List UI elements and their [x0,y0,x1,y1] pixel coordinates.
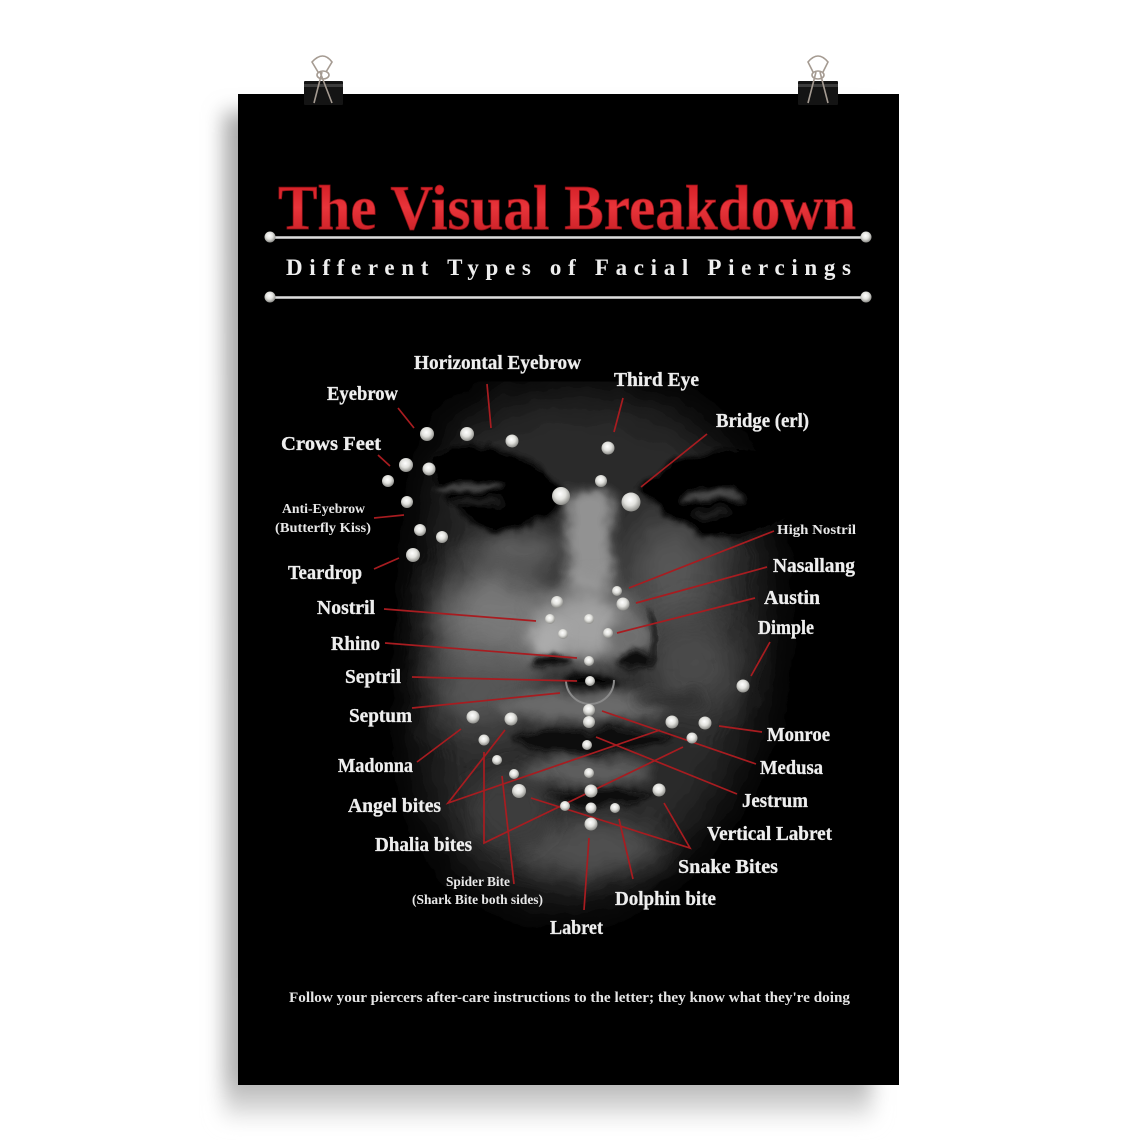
label: Nostril: Nostril [317,597,375,619]
subtitle: Different Types of Facial Piercings [286,255,851,280]
label: Bridge (erl): Bridge (erl) [716,410,809,432]
label: Dimple: Dimple [758,617,814,639]
label: Madonna: Madonna [338,755,413,777]
septum ring [566,680,614,704]
label: Third Eye: Third Eye [614,369,699,391]
label: Vertical Labret: Vertical Labret [707,823,832,845]
piercing labels [275,352,856,939]
label: Crows Feet: Crows Feet [281,433,381,455]
piercing studs [382,427,750,830]
label: Septum: Septum [349,705,412,727]
label: High Nostril: High Nostril [777,523,856,538]
nose [529,490,656,692]
label: Septril: Septril [345,666,401,688]
left brow and eye [432,447,562,530]
poster drop shadow [224,112,872,1118]
poster background [238,94,899,1085]
label: Nasallang: Nasallang [773,555,855,577]
label: Snake Bites: Snake Bites [678,856,778,878]
mouth [468,690,708,876]
label: Austin: Austin [764,587,820,609]
label: Angel bites: Angel bites [348,795,441,817]
top barbell rule [264,232,872,242]
label: Teardrop: Teardrop [288,562,362,584]
label: (Butterfly Kiss): (Butterfly Kiss) [275,521,371,536]
label: Labret: Labret [550,917,603,939]
label: Medusa: Medusa [760,757,823,779]
label: Jestrum: Jestrum [742,790,808,812]
leader lines [374,384,774,910]
binder clip left [304,56,343,105]
face portrait [423,392,800,900]
right brow and eye [638,448,770,542]
title: The Visual Breakdown [278,172,856,243]
label: Spider Bite: Spider Bite [446,875,510,890]
footer note: Follow your piercers after-care instructions to the letter; they know what they're doing [289,990,850,1006]
label: Dolphin bite: Dolphin bite [615,888,716,910]
label: (Shark Bite both sides): (Shark Bite both sides) [412,893,543,908]
label: Rhino: Rhino [331,633,380,655]
binder clip right [798,56,838,105]
label: Eyebrow: Eyebrow [327,383,399,405]
lower barbell rule [264,292,872,302]
label: Horizontal Eyebrow: Horizontal Eyebrow [414,352,582,374]
label: Monroe: Monroe [767,724,830,746]
label: Dhalia bites: Dhalia bites [375,834,472,856]
label: Anti-Eyebrow: Anti-Eyebrow [282,502,366,517]
